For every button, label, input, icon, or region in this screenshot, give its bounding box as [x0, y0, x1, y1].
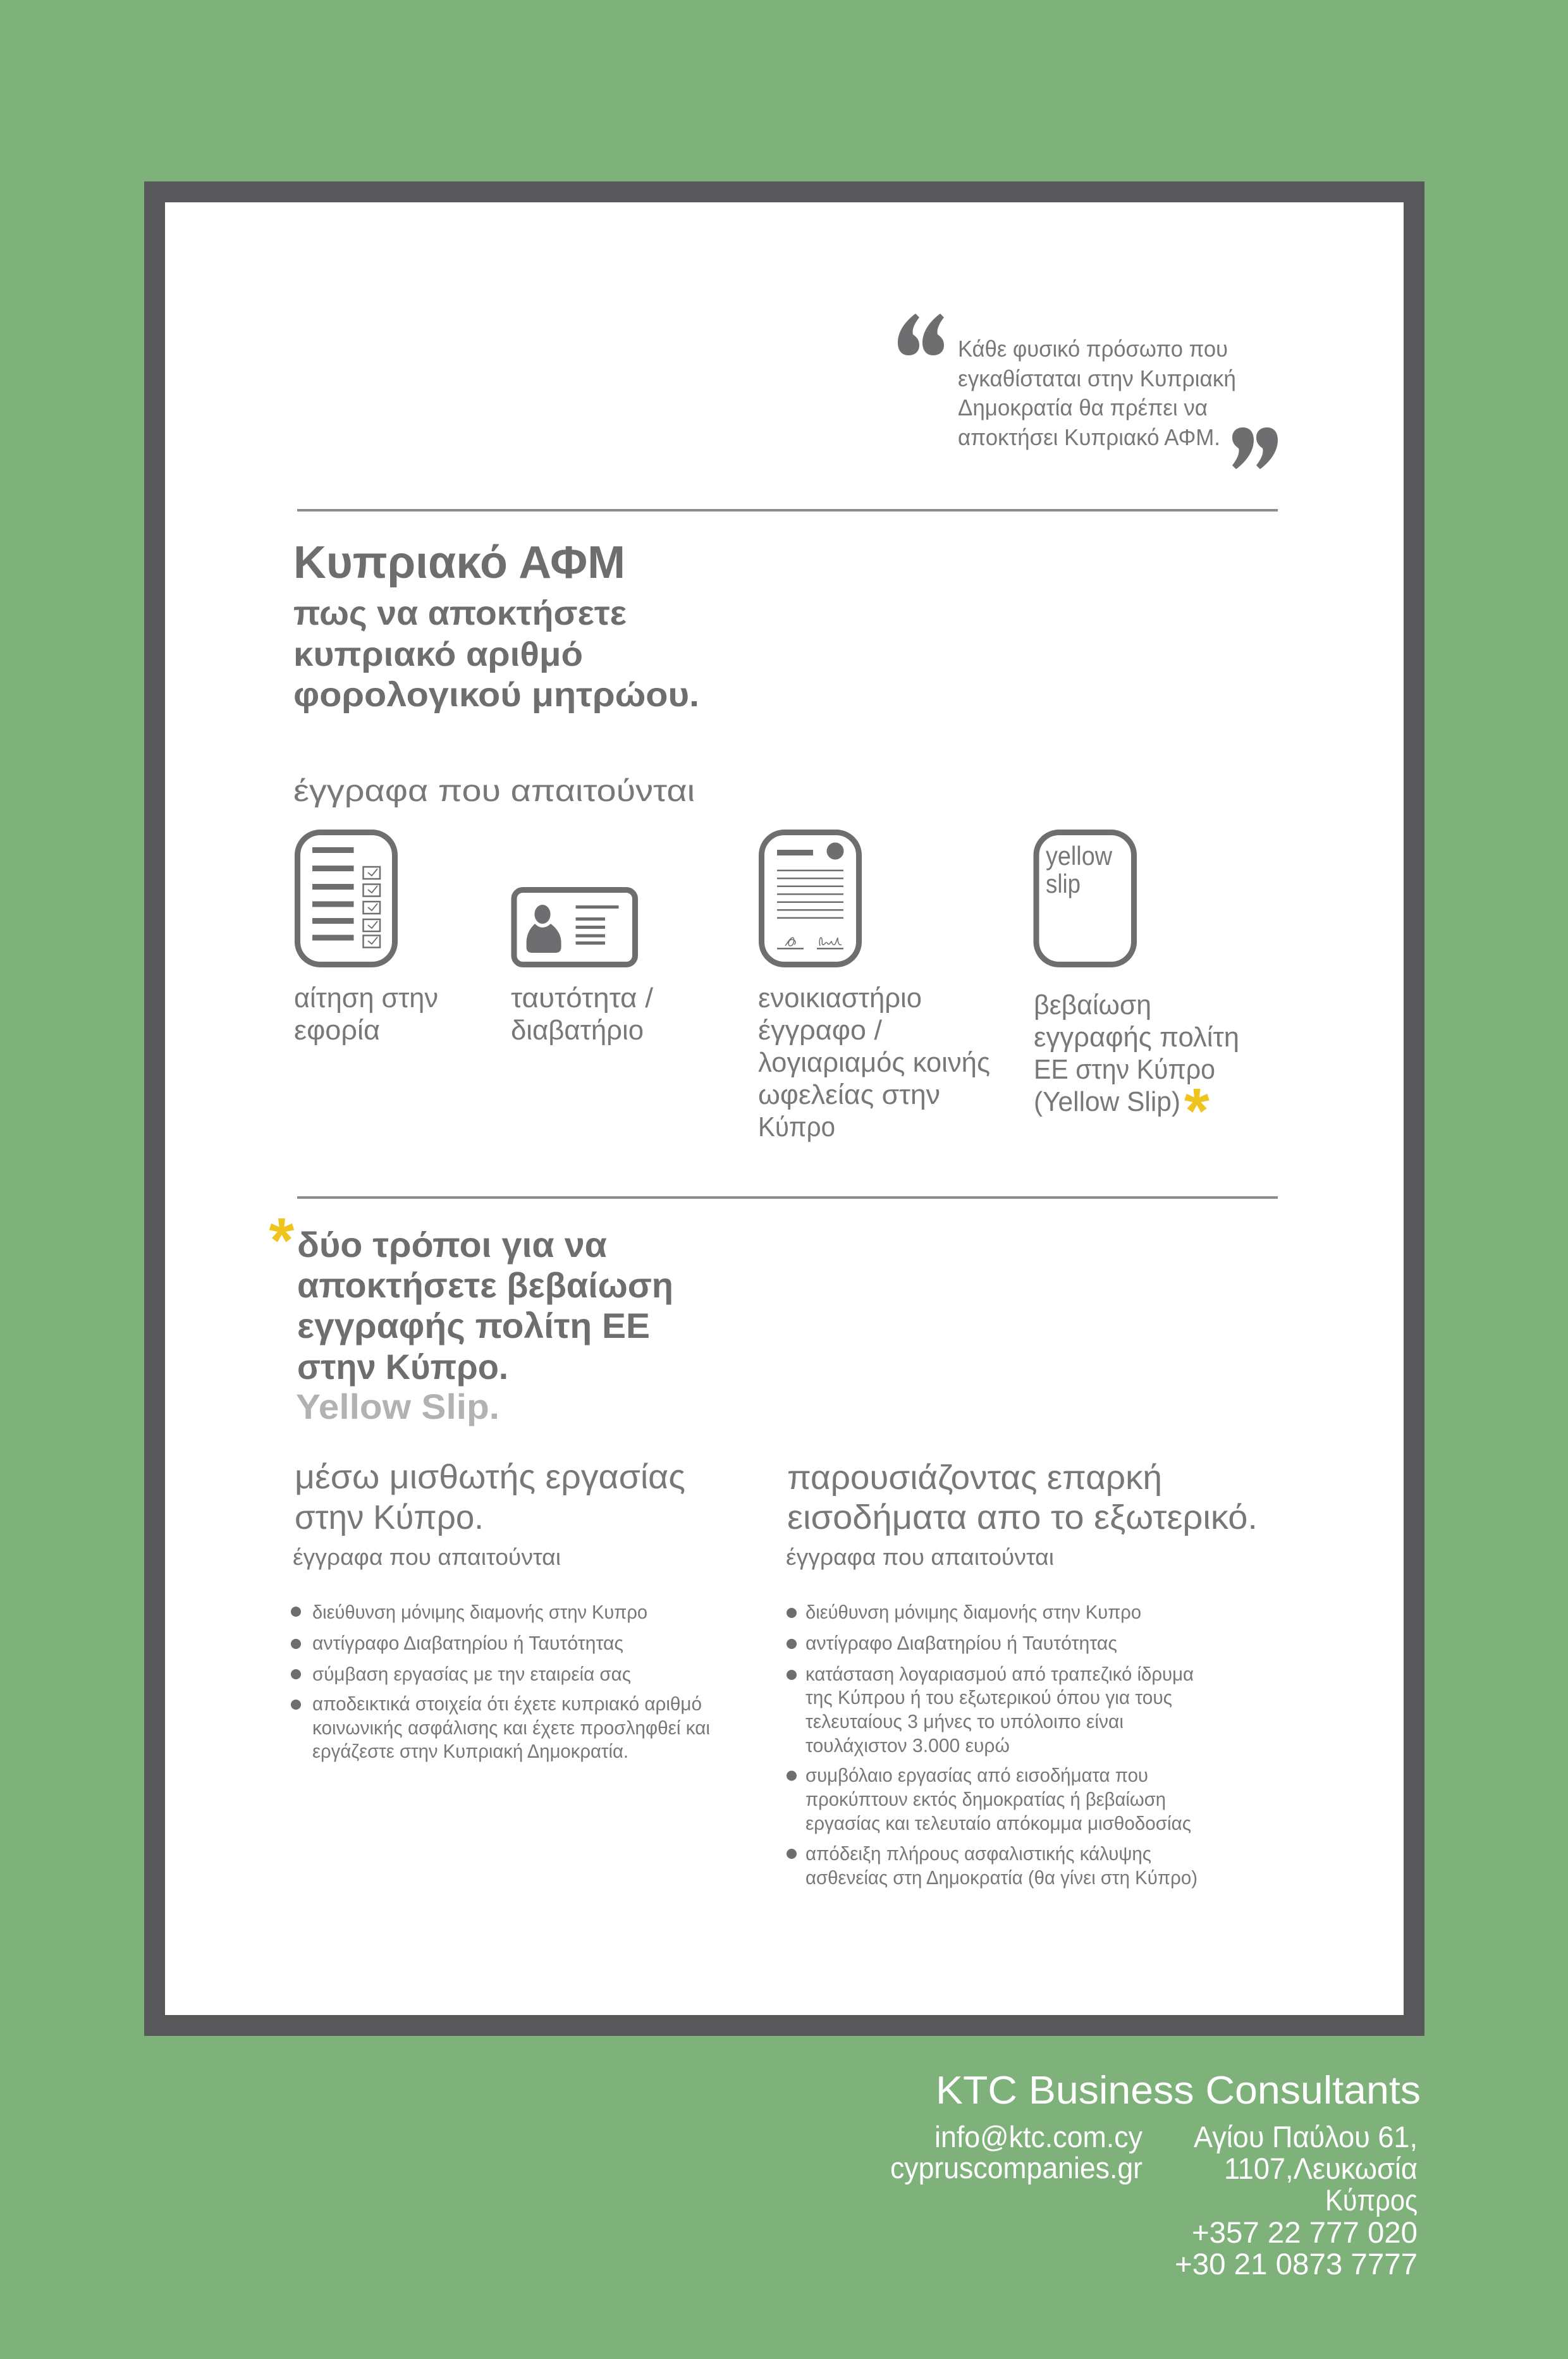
address and phone numbers: +357 22 777 020: [1192, 2215, 1418, 2249]
subtitle: [293, 594, 699, 714]
heading: two ways to obtain the certificate: στην Κύπρο.: [297, 1347, 508, 1387]
bullet list: employment documents: αποδεικτικά στοιχεία ότι έχετε κυπριακό αριθμό: [312, 1693, 702, 1715]
heading: required documents: έγγραφα που απαιτούνται: [293, 775, 695, 808]
heading: two ways to obtain the certificate: δύο τρόποι για να: [297, 1225, 607, 1265]
bullet list: foreign income documents: της Κύπρου ή του εξωτερικού όπου για τους: [805, 1686, 1172, 1708]
icon: yellow asterisk in caption: [1184, 1089, 1210, 1113]
icon: yellow slip card: [1036, 832, 1134, 965]
column heading: foreign income: παρουσιάζοντας επαρκή: [787, 1459, 1162, 1497]
panel: foreign income route: [786, 1459, 1258, 1889]
caption: identity card or passport: ταυτότητα /: [511, 983, 654, 1014]
caption: rental document: [758, 983, 990, 1143]
icon: ID card: [514, 890, 635, 965]
subtitle: πως να αποκτήσετε: [293, 594, 627, 632]
heading: two ways to obtain the certificate: εγγραφής πολίτη ΕΕ: [297, 1306, 650, 1345]
icon: signed rental document: [761, 832, 859, 965]
caption: yellow slip: εγγραφής πολίτη: [1034, 1022, 1239, 1053]
column heading: foreign income: [787, 1459, 1258, 1536]
panel: dark frame with white sheet: [144, 181, 1424, 2036]
quote text: Δημοκρατία θα πρέπει να: [958, 395, 1208, 420]
heading: two ways to obtain the certificate: [296, 1225, 673, 1426]
bullet list: foreign income documents: συμβόλαιο εργασίας από εισοδήματα που: [805, 1764, 1148, 1786]
online contacts: info@ktc.com.cy: [934, 2120, 1142, 2154]
bullet list: employment documents: αντίγραφο Διαβατηρίου ή Ταυτότητας: [312, 1632, 623, 1654]
bullet list: employment documents: σύμβαση εργασίας με την εταιρεία σας: [312, 1663, 631, 1685]
address and phone numbers: [1175, 2120, 1418, 2281]
bullet list: foreign income documents: κατάσταση λογαριασμού από τραπεζικό ίδρυμα: [805, 1663, 1194, 1685]
subheading: required documents: έγγραφα που απαιτούνται: [786, 1544, 1054, 1570]
column heading: employment: [295, 1458, 685, 1536]
heading: two ways to obtain the certificate: αποκτήσετε βεβαίωση: [297, 1265, 673, 1305]
caption: rental document: ωφελείας στην: [758, 1079, 940, 1110]
heading: two ways to obtain the certificate: Yellow Slip.: [296, 1387, 499, 1426]
quote text: Κάθε φυσικό πρόσωπο που: [958, 336, 1228, 362]
bullet list: foreign income documents: τελευταίους 3 μήνες το υπόλοιπο είναι: [805, 1710, 1124, 1732]
bullet list: employment documents: διεύθυνση μόνιμης διαμονής στην Κυπρο: [312, 1601, 647, 1623]
bullet list: foreign income documents: ασθενείας στη Δημοκρατία (θα γίνει στη Κύπρο): [805, 1866, 1197, 1889]
caption: yellow slip: [1034, 990, 1239, 1117]
column heading: employment: μέσω μισθωτής εργασίας: [295, 1458, 685, 1496]
address and phone numbers: +30 21 0873 7777: [1175, 2247, 1418, 2281]
bullet list: foreign income documents: τουλάχιστον 3.000 ευρώ: [805, 1734, 1010, 1756]
address and phone numbers: Κύπρος: [1325, 2183, 1418, 2217]
bullet list: foreign income documents: προκύπτουν εκτός δημοκρατίας ή βεβαίωση: [805, 1788, 1166, 1810]
footer: company contact details: [890, 2069, 1421, 2281]
caption: application: εφορία: [294, 1015, 380, 1046]
quote text: αποκτήσει Κυπριακό ΑΦΜ.: [958, 424, 1220, 450]
icon: application form with checklist: [297, 832, 395, 965]
caption: yellow slip: (Yellow Slip): [1034, 1086, 1180, 1117]
subheading: required documents: έγγραφα που απαιτούνται: [293, 1544, 561, 1570]
caption: rental document: έγγραφο /: [758, 1015, 883, 1046]
icon: opening quotation mark: [898, 314, 944, 355]
address and phone numbers: Αγίου Παύλου 61,: [1194, 2120, 1418, 2154]
caption: rental document: ενοικιαστήριο: [758, 983, 922, 1014]
bullet list: foreign income documents: αντίγραφο Διαβατηρίου ή Ταυτότητας: [805, 1632, 1117, 1654]
column heading: employment: στην Κύπρο.: [295, 1498, 484, 1536]
online contacts: [890, 2120, 1142, 2184]
bullet list: employment documents: κοινωνικής ασφάλισης και έχετε προσληφθεί και: [312, 1717, 710, 1739]
icon: yellow asterisk beside heading: [269, 1218, 294, 1242]
title: Κυπριακό ΑΦΜ: [293, 537, 625, 588]
icon: yellow slip card: yellow: [1046, 841, 1113, 871]
icon: yellow slip card: slip: [1046, 869, 1081, 898]
quote text: εγκαθίσταται στην Κυπριακή: [958, 365, 1236, 391]
column heading: foreign income: εισοδήματα απο το εξωτερικό.: [787, 1498, 1258, 1536]
caption: application: [294, 983, 438, 1046]
bullet list: foreign income documents: εργασίας και τελευταίο απόκομμα μισθοδοσίας: [805, 1812, 1191, 1834]
caption: identity card or passport: διαβατήριο: [511, 1015, 644, 1046]
subtitle: φορολογικού μητρώου.: [293, 676, 699, 714]
bullet list: employment documents: εργάζεστε στην Κυπριακή Δημοκρατία.: [312, 1740, 628, 1762]
caption: rental document: λογιαριαμός κοινής: [758, 1047, 990, 1078]
caption: yellow slip: ΕΕ στην Κύπρο: [1034, 1054, 1215, 1085]
bullet list: foreign income documents: διεύθυνση μόνιμης διαμονής στην Κυπρο: [805, 1601, 1141, 1623]
panel: employment route: [291, 1458, 710, 1762]
caption: rental document: Κύπρο: [758, 1112, 835, 1143]
bullet list: foreign income documents: [787, 1601, 1197, 1889]
icon: closing quotation mark: [1232, 427, 1278, 469]
online contacts: cypruscompanies.gr: [890, 2151, 1142, 2184]
company name: KTC Business Consultants: [936, 2069, 1421, 2112]
subtitle: κυπριακό αριθμό: [293, 635, 583, 673]
caption: identity card or passport: [511, 983, 654, 1046]
address and phone numbers: 1107,Λευκωσία: [1224, 2152, 1418, 2185]
bullet list: foreign income documents: απόδειξη πλήρους ασφαλιστικής κάλυψης: [805, 1842, 1151, 1865]
quote text: [958, 336, 1236, 450]
bullet list: employment documents: [291, 1601, 710, 1762]
caption: application: αίτηση στην: [294, 983, 438, 1014]
caption: yellow slip: βεβαίωση: [1034, 990, 1151, 1020]
quote block: [898, 314, 1278, 469]
